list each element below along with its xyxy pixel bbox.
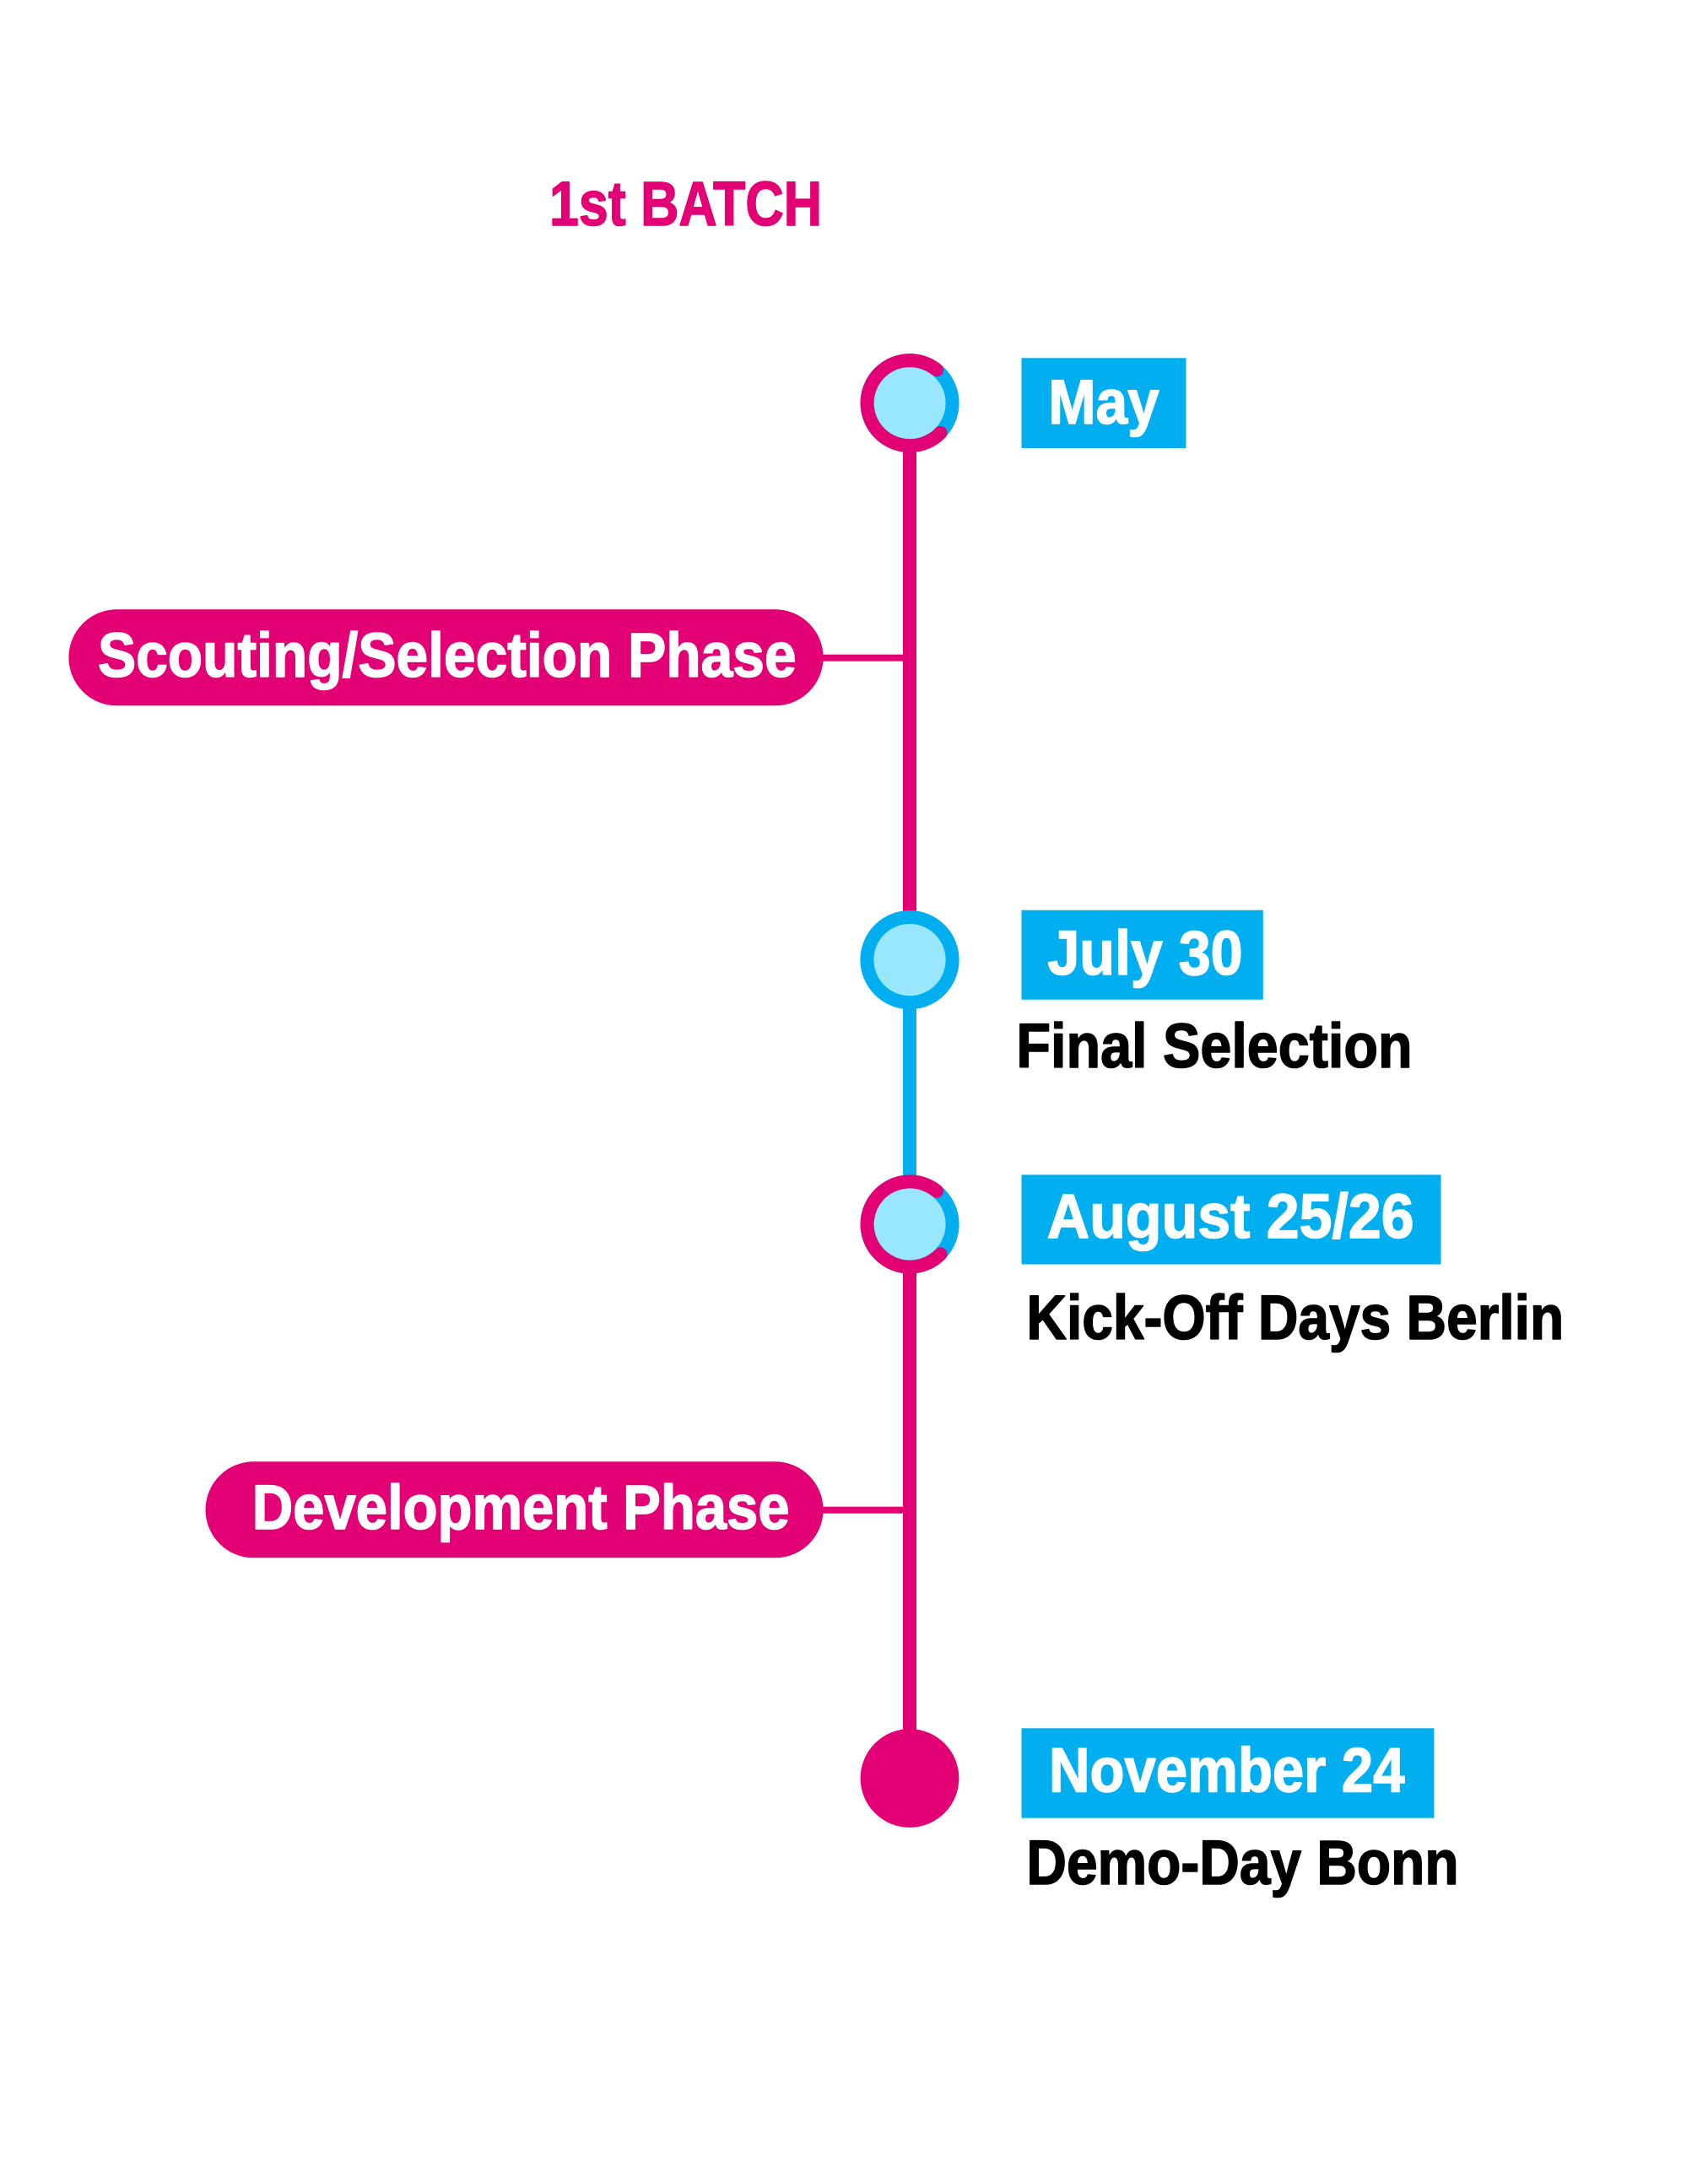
date label: May: May <box>1048 367 1159 437</box>
event text: kick-off days: Kick-Off Days Berlin <box>1026 1282 1564 1353</box>
title: 1st BATCH <box>549 169 822 239</box>
date label: July 30 <box>1021 910 1263 1000</box>
milestone marker: May <box>867 360 953 446</box>
event text: final selection: Final Selection <box>1016 1011 1413 1081</box>
milestone marker: August 25/26 <box>867 1181 953 1267</box>
phase label: development <box>206 1461 905 1558</box>
date label: May <box>1021 358 1186 448</box>
phase label: scouting/selection: Scouting/Selection Phase <box>98 620 797 690</box>
timeline line: scouting segment <box>903 447 916 915</box>
milestone marker: November 24 <box>861 1729 959 1828</box>
event text: demo-day: Demo-Day Bonn <box>1026 1828 1459 1898</box>
phase label: scouting/selection <box>68 609 905 705</box>
phase label: development: Development Phase <box>252 1472 790 1542</box>
date label: November 24: November 24 <box>1049 1735 1405 1806</box>
milestone marker: July 30 <box>867 917 953 1002</box>
date label: July 30: July 30 <box>1047 918 1243 988</box>
date label: August 25/26: August 25/26 <box>1047 1181 1414 1251</box>
timeline line: development segment <box>903 1270 916 1734</box>
timeline line: final selection segment <box>903 1004 916 1181</box>
